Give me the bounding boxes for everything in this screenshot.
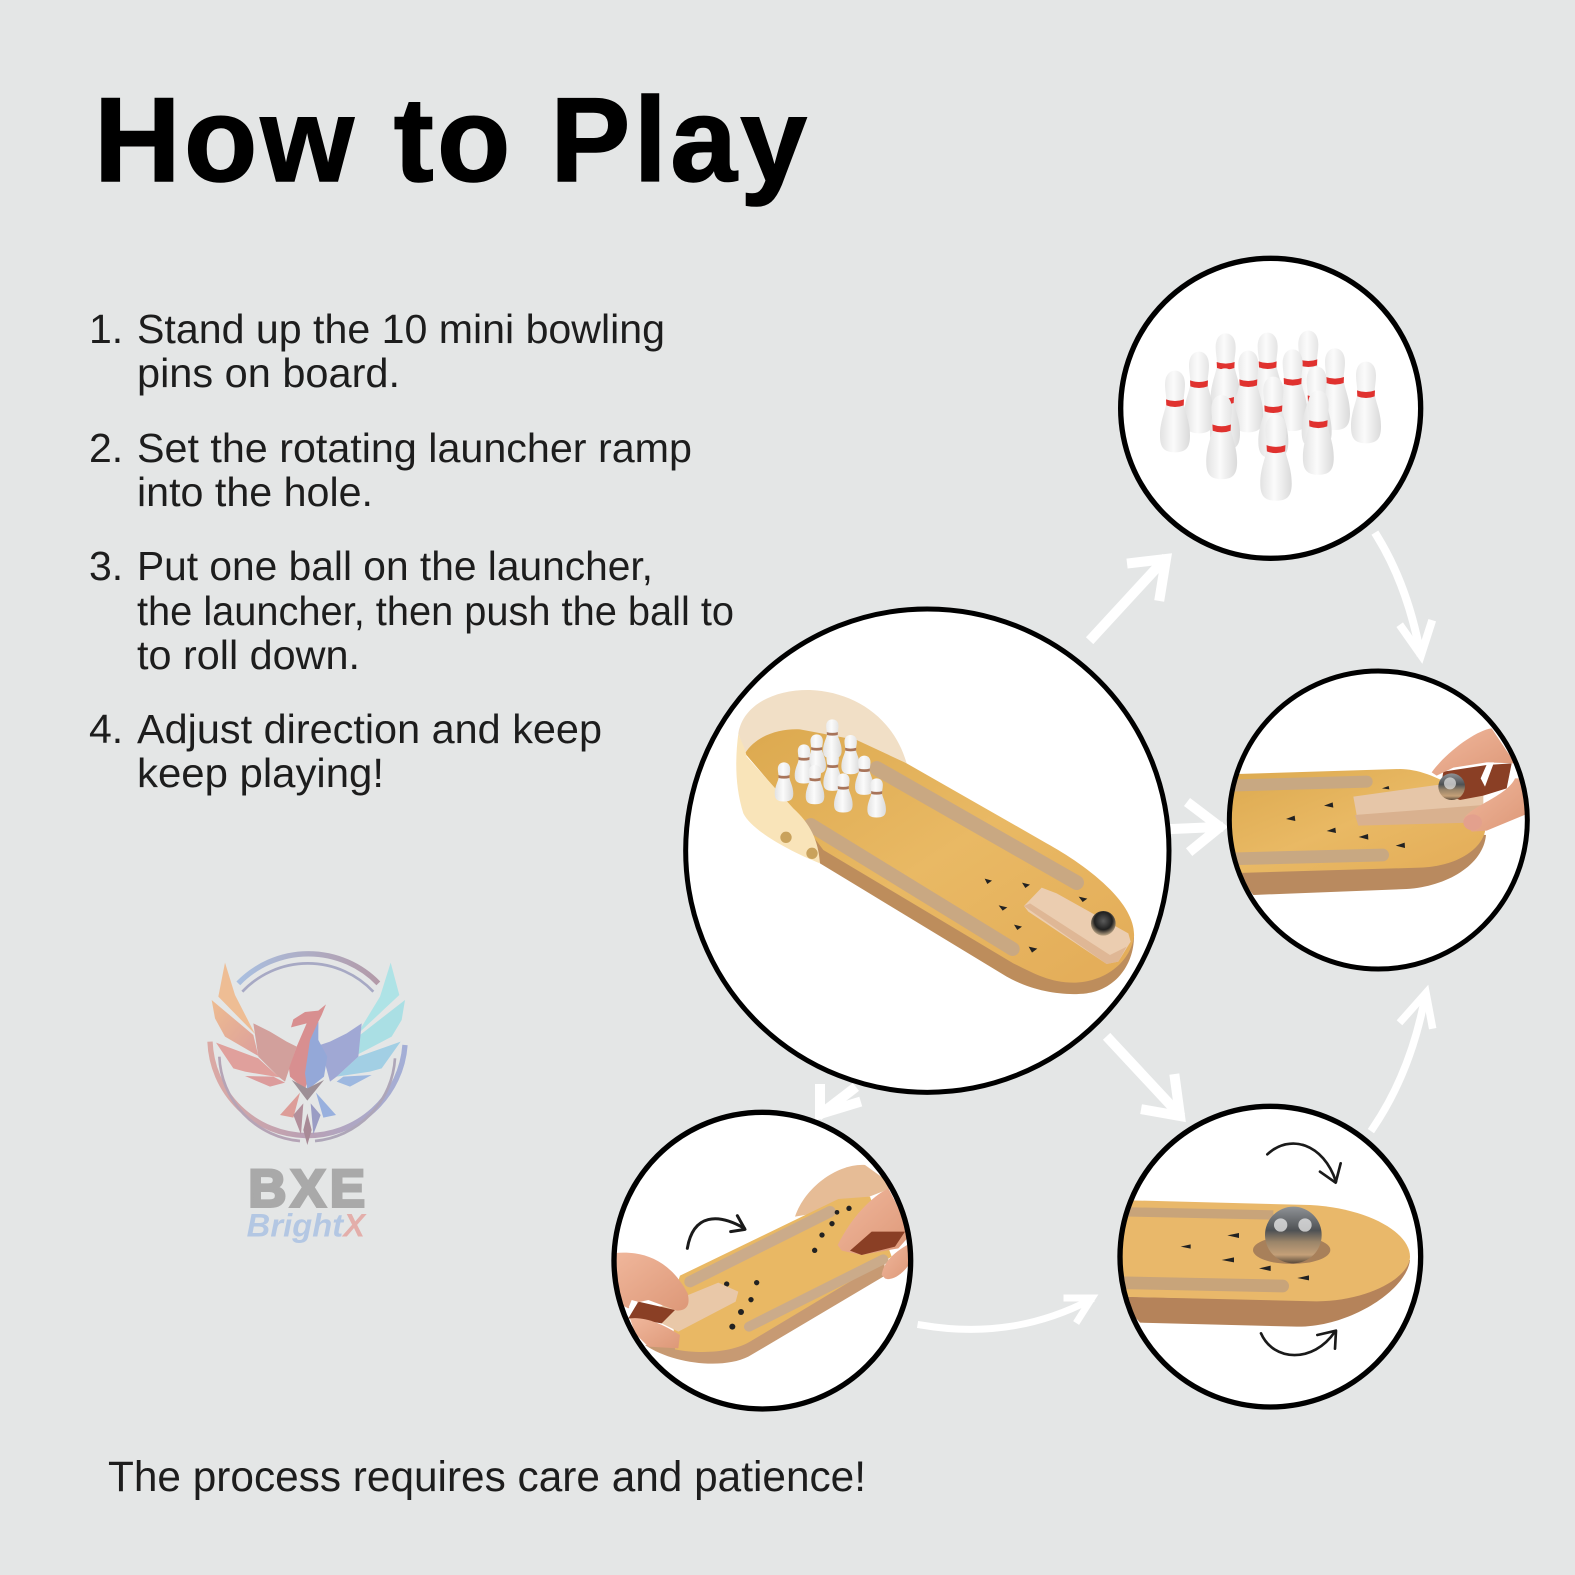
arrow: pins to hand push: [1377, 536, 1431, 655]
board surface: [745, 729, 1134, 983]
step 2: Set the rotating launcher ramp: [137, 425, 692, 471]
step 3: 3.: [89, 543, 123, 589]
circle: ball in launcher hole: [1117, 1106, 1421, 1407]
logo wordmark BXE: BXE: [248, 1159, 365, 1218]
holes: [724, 1206, 852, 1330]
steel ball: [1265, 1207, 1322, 1263]
circle: full board: [686, 609, 1169, 1092]
slots: [877, 768, 1077, 883]
arrow: board to two hands: [820, 1089, 856, 1114]
hand: [1440, 763, 1512, 800]
bowling pins: [1160, 331, 1381, 501]
arrow: board to hand push: [1172, 805, 1220, 849]
step 3: [89, 543, 734, 678]
step 1: Stand up the 10 mini bowling: [137, 306, 665, 352]
circle: hand pushes ball: [1227, 671, 1528, 969]
slots: [690, 1212, 830, 1282]
circle: two hands rotate board: [612, 1112, 912, 1409]
step 1: 1.: [89, 306, 123, 352]
board side: [1117, 1260, 1410, 1327]
board side: [814, 838, 1134, 994]
phoenix: [212, 963, 405, 1145]
back wall: [795, 1165, 895, 1217]
step 2: into the hole.: [137, 469, 373, 515]
arrows between steps: [820, 536, 1432, 1329]
step 4: Adjust direction and keep: [137, 706, 602, 752]
holes: [1181, 1233, 1309, 1280]
launcher: [652, 1283, 738, 1332]
slots: [1227, 782, 1367, 786]
logo: [210, 954, 405, 1244]
step 1: pins on board.: [137, 350, 400, 396]
step 2: [89, 425, 692, 515]
launcher: [1024, 888, 1131, 964]
step 4: 4.: [89, 706, 123, 752]
slots: [1117, 1212, 1273, 1215]
left hand: [628, 1302, 675, 1323]
logo wordmark BrightX: BrightX: [247, 1207, 367, 1244]
launcher hole: [1253, 1240, 1330, 1264]
circle: pins: [1121, 258, 1421, 558]
front wall: [736, 733, 820, 863]
step 3: to roll down.: [137, 632, 360, 678]
right hand: [838, 1188, 912, 1255]
board side: [1230, 832, 1486, 895]
step 1: [89, 306, 665, 396]
step 4: keep playing!: [137, 750, 384, 796]
rotate arrow bottom: [1261, 1331, 1336, 1355]
rotate arrow top: [1267, 1144, 1341, 1183]
step 3: Put one ball on the launcher,: [137, 543, 653, 589]
footer text: The process requires care and patience!: [108, 1454, 866, 1501]
back wall: [738, 690, 907, 763]
instructions list: [89, 306, 734, 796]
arrow: two hands to ball launcher: [921, 1298, 1092, 1329]
board surface: [672, 1197, 892, 1352]
title: How to Play: [94, 73, 807, 207]
ball: [1091, 911, 1116, 936]
ball: [1438, 773, 1465, 800]
board surface: [1117, 1200, 1410, 1301]
rotate arrow: [687, 1216, 745, 1248]
step 2: 2.: [89, 425, 123, 471]
pins: [775, 719, 886, 818]
arrow: board to ball launcher: [1110, 1040, 1180, 1116]
logo ring: [210, 954, 405, 1141]
holes: [1286, 786, 1405, 848]
holes: [985, 879, 1087, 953]
step 3: the launcher, then push the ball to: [137, 588, 734, 634]
board surface: [1227, 769, 1485, 873]
arrow: board to pins: [1093, 559, 1166, 637]
launcher: [1353, 785, 1483, 815]
arrow: ball launcher to hand push: [1373, 993, 1432, 1128]
board side: [645, 1260, 885, 1364]
step 4: [89, 706, 602, 796]
